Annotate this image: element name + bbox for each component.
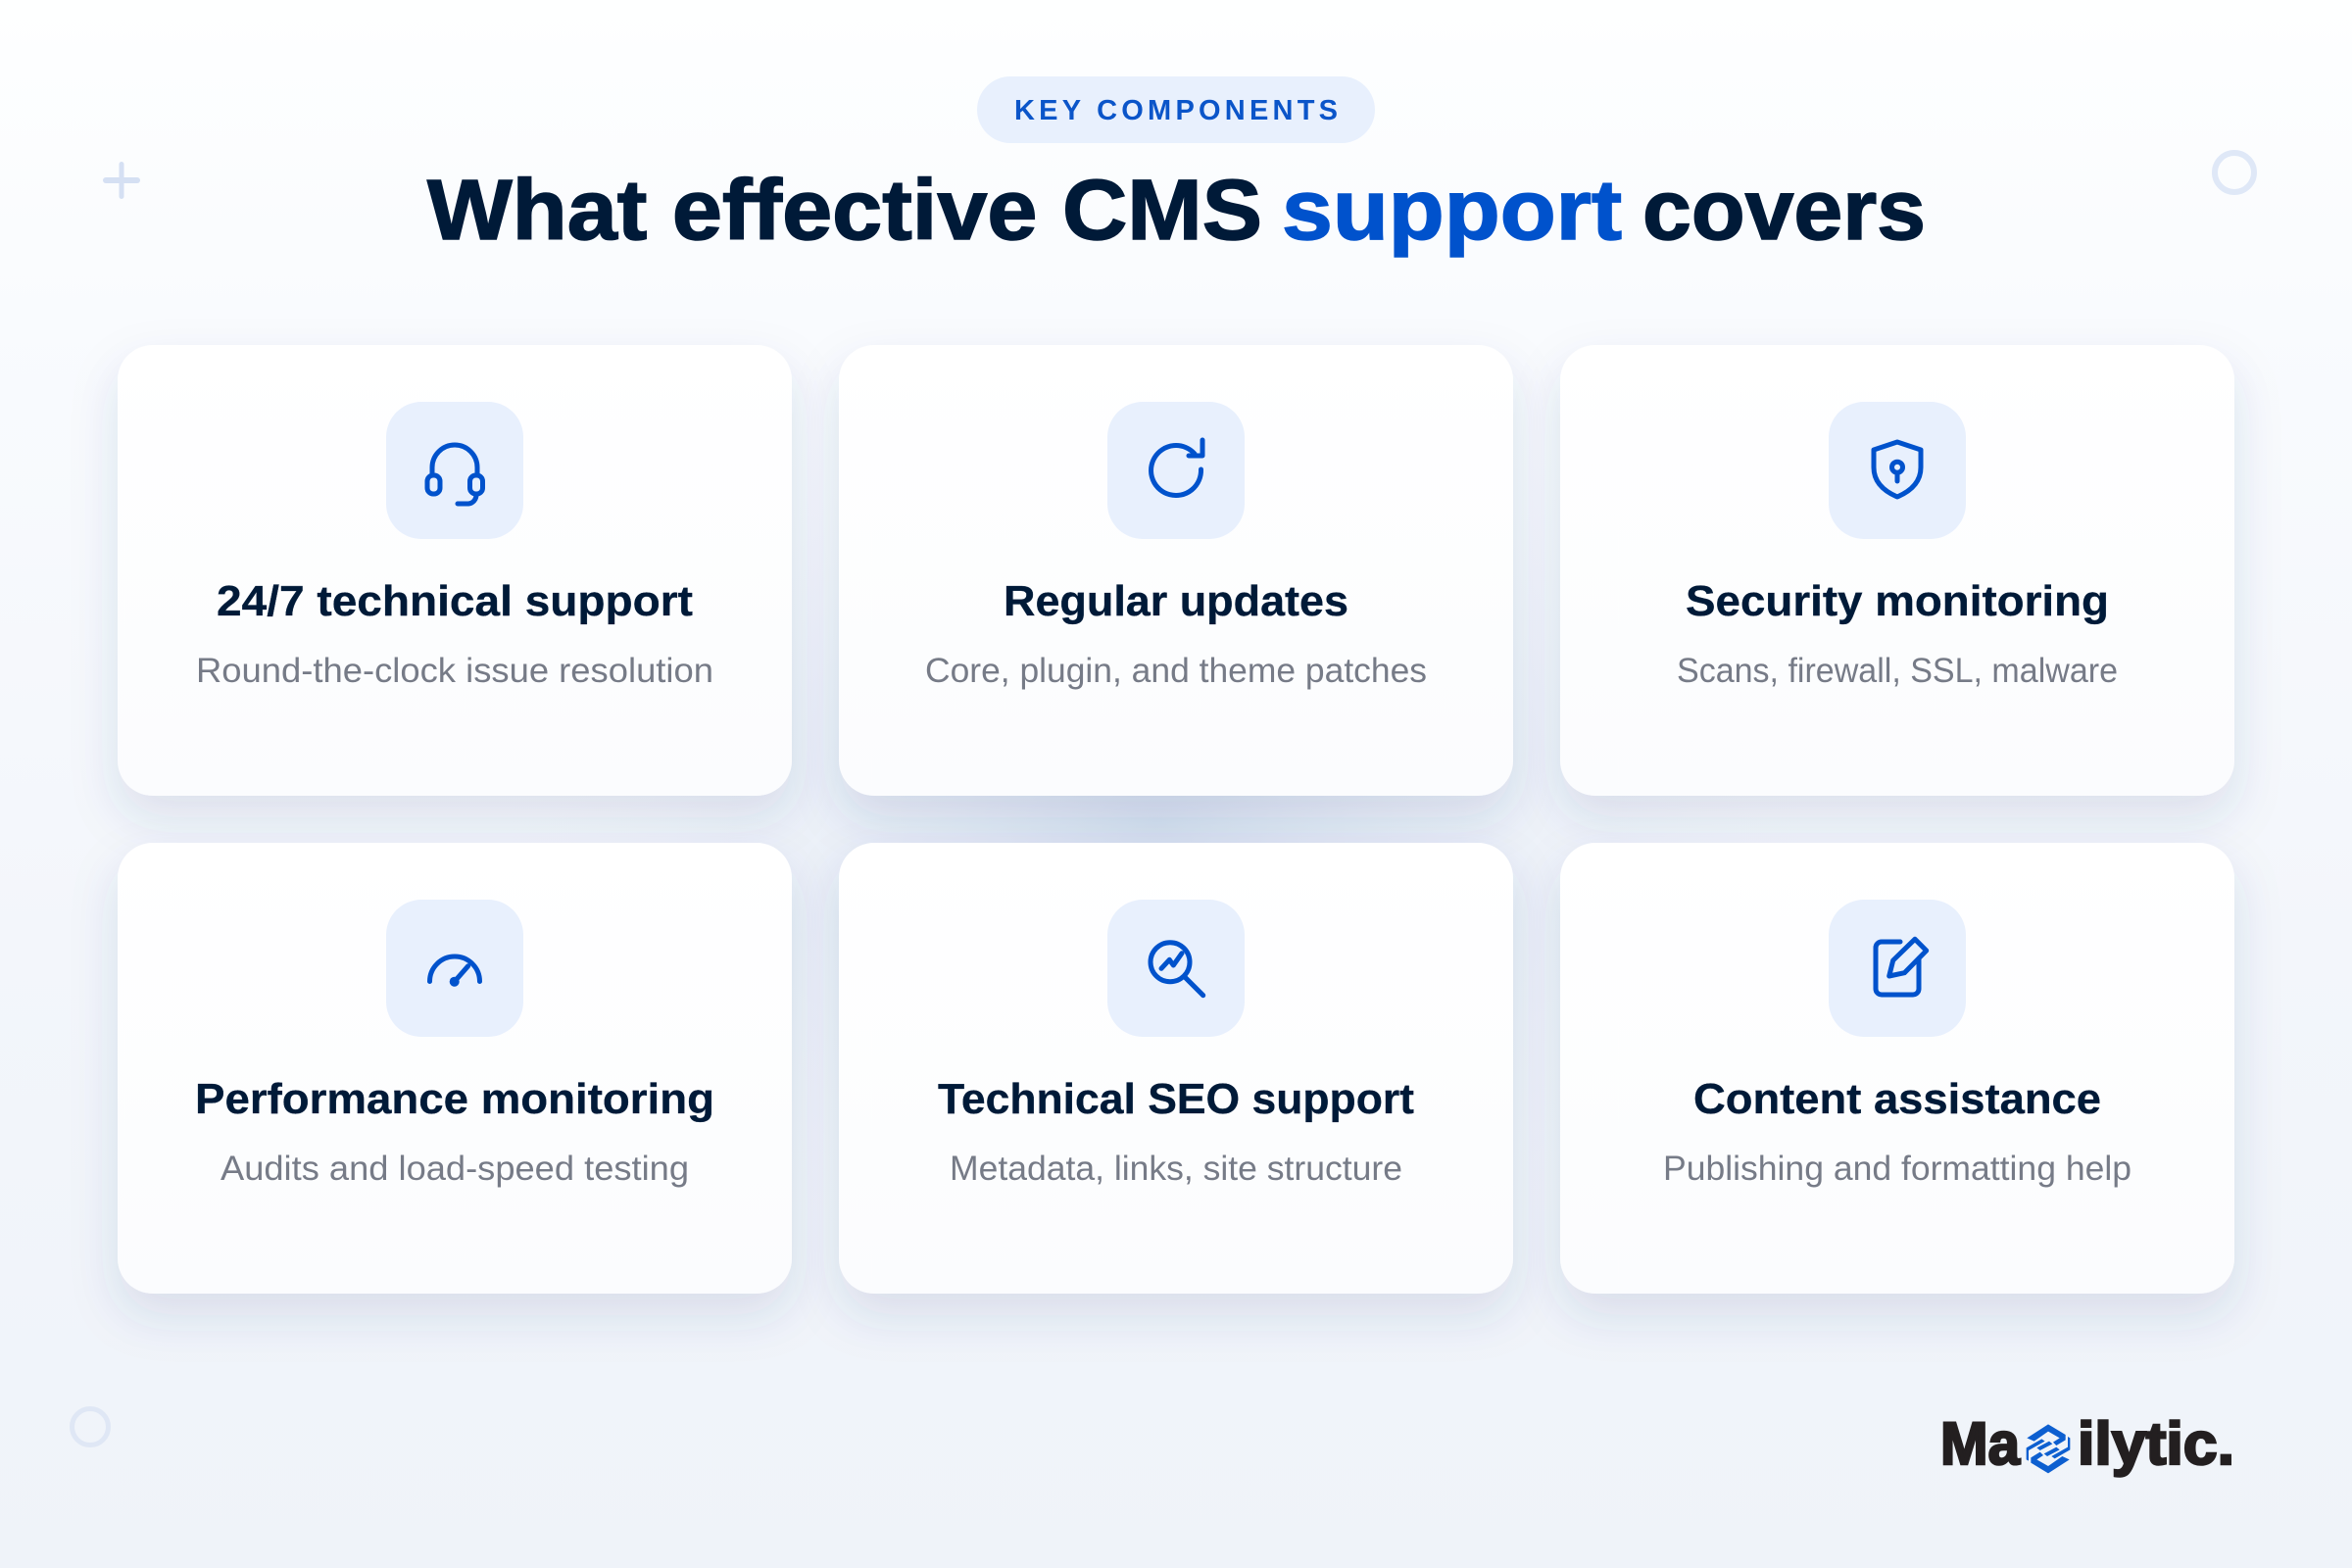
title: support: [1282, 163, 1622, 258]
heading: 24/7 technical support: [217, 577, 693, 625]
panel: Security monitoring: [1560, 345, 2234, 796]
decorative ring top right: [2215, 153, 2254, 192]
title: covers: [1642, 163, 1926, 258]
panel: 24/7 technical support: [118, 345, 792, 796]
title: What effective CMS: [427, 163, 1262, 258]
decorative ring bottom left: [73, 1409, 108, 1445]
icon: magnifier with trend line: [1107, 900, 1245, 1037]
panel: Regular updates: [839, 345, 1513, 796]
description: Core, plugin, and theme patches: [925, 652, 1427, 690]
eyebrow pill: KEY COMPONENTS: [1014, 95, 1338, 126]
heading: Content assistance: [1693, 1075, 2101, 1123]
description: Round-the-clock issue resolution: [196, 652, 713, 690]
icon: logo hexagon: [2027, 1424, 2070, 1473]
icon: edit pencil: [1829, 900, 1966, 1037]
heading: Technical SEO support: [938, 1075, 1414, 1123]
panel: Performance monitoring: [118, 843, 792, 1294]
description: Metadata, links, site structure: [950, 1150, 1402, 1188]
icon: gauge: [386, 900, 523, 1037]
icon: refresh: [1107, 402, 1245, 539]
panel: Technical SEO support: [839, 843, 1513, 1294]
logo: Mazilytic: Ma: [1940, 1410, 2021, 1477]
logo: Mazilytic: ilytic.: [2078, 1410, 2234, 1477]
icon: shield with keyhole: [1829, 402, 1966, 539]
icon: headset: [386, 402, 523, 539]
logo: Mazilytic: [1940, 1410, 2234, 1477]
panel: Content assistance: [1560, 843, 2234, 1294]
heading: Performance monitoring: [195, 1075, 714, 1123]
description: Scans, firewall, SSL, malware: [1677, 652, 2118, 690]
heading: Security monitoring: [1686, 577, 2109, 625]
eyebrow pill: [977, 76, 1375, 143]
decorative plus: [103, 162, 140, 199]
description: Audits and load-speed testing: [220, 1150, 689, 1188]
heading: Regular updates: [1004, 577, 1348, 625]
description: Publishing and formatting help: [1663, 1150, 2132, 1188]
title: [427, 163, 1926, 258]
